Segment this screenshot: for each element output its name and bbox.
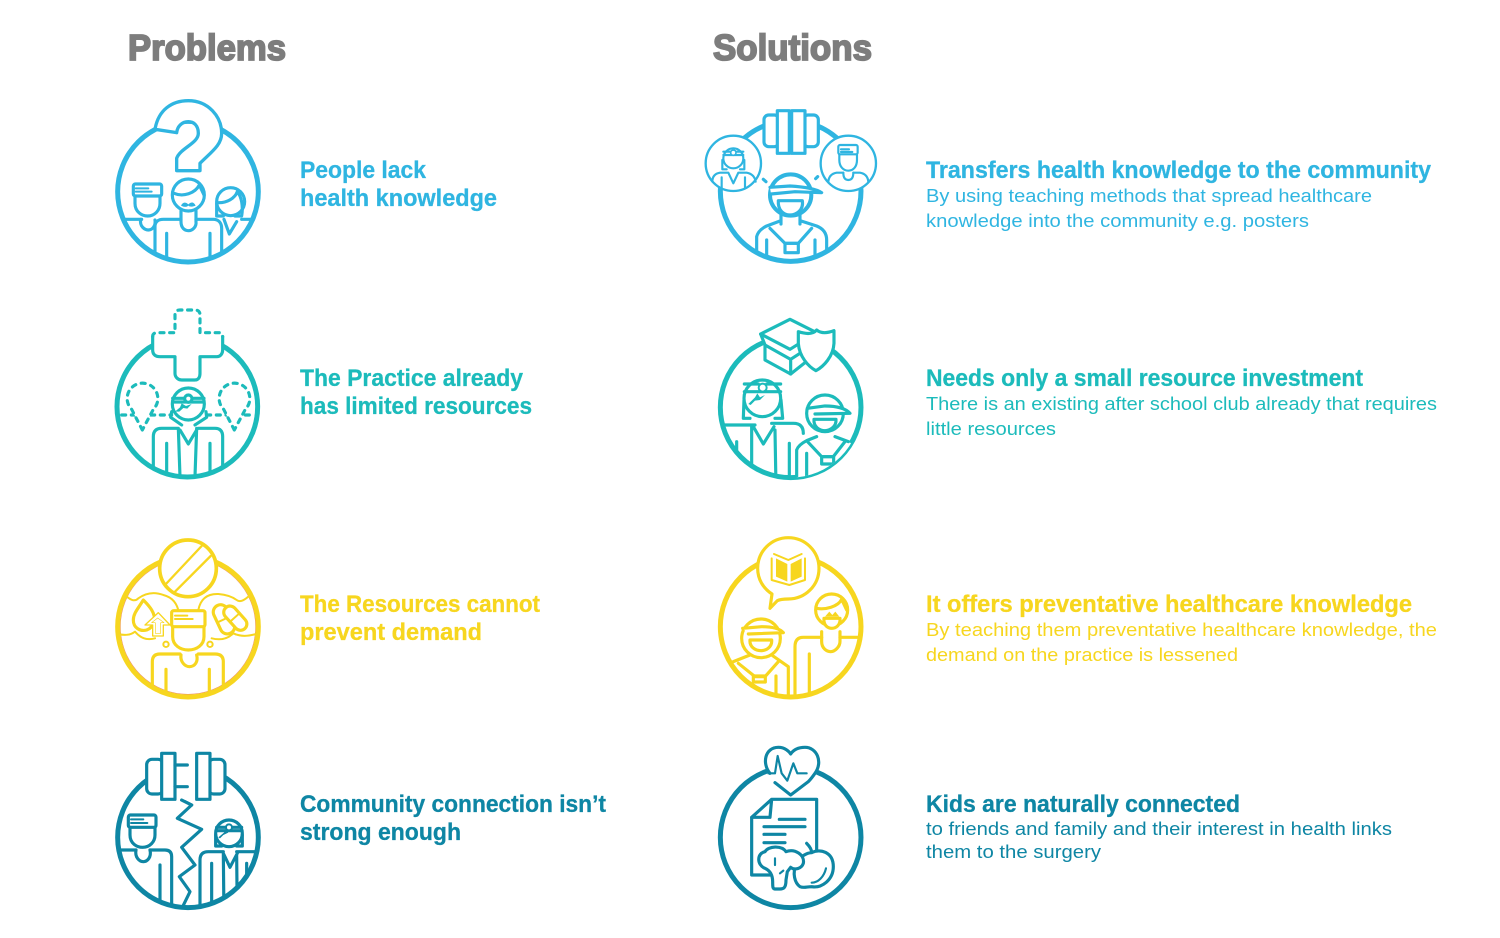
icon: box, shield, doctor and child (720, 319, 861, 487)
icon: pill, clouds and patient (118, 540, 258, 707)
icon: unplugged connection between patient and doctor (117, 750, 260, 917)
text: transfers health knowledge: By using teaching methods that spread healthcare (926, 185, 1372, 206)
text: people lack health knowledge: People lack (300, 157, 427, 184)
icon: heart, document, broccoli and apple (720, 747, 861, 908)
text: kids are naturally connected: Kids are naturally connected (926, 791, 1240, 818)
text: transfers health knowledge: Transfers health knowledge to the community (926, 157, 1432, 184)
icon: child linking doctor and patient (706, 110, 876, 261)
text: resources cannot prevent demand: prevent demand (300, 619, 482, 646)
icon: dashed cross and doctor (117, 310, 258, 477)
text: people lack health knowledge: health knowledge (300, 185, 497, 212)
text: community connection: Community connection isn’t (300, 791, 606, 818)
text: preventative healthcare knowledge: demand on the practice is lessened (926, 644, 1238, 665)
text: small resource investment: There is an existing after school club already that requires (926, 393, 1437, 414)
icon: speech bubble with book, child and adult (720, 538, 863, 707)
text: community connection (300, 791, 606, 846)
text: small resource investment: little resources (926, 418, 1056, 439)
text: limited resources: The Practice already (300, 365, 524, 392)
heading: Solutions: Solutions (713, 27, 872, 68)
text: kids are naturally connected: to friends and family and their interest in health links (926, 818, 1392, 839)
text: small resource investment (926, 365, 1437, 439)
text: preventative healthcare knowledge (926, 591, 1437, 665)
text: kids are naturally connected: them to the surgery (926, 841, 1102, 862)
text: limited resources (300, 365, 532, 420)
heading: Problems: Problems (128, 27, 286, 68)
text: people lack health knowledge (300, 157, 497, 212)
text: resources cannot prevent demand (300, 591, 540, 646)
text: preventative healthcare knowledge: It offers preventative healthcare knowledge (926, 591, 1412, 618)
text: transfers health knowledge (926, 157, 1432, 231)
text: community connection: strong enough (300, 819, 461, 846)
icon: question mark over three people (118, 101, 258, 267)
text: small resource investment: Needs only a small resource investment (926, 365, 1363, 392)
text: limited resources: has limited resources (300, 393, 532, 420)
text: preventative healthcare knowledge: By teaching them preventative healthcare knowledge, the (926, 619, 1437, 640)
text: resources cannot prevent demand: The Resources cannot (300, 591, 540, 618)
text: kids are naturally connected (926, 791, 1392, 862)
text: transfers health knowledge: knowledge into the community e.g. posters (926, 210, 1309, 231)
